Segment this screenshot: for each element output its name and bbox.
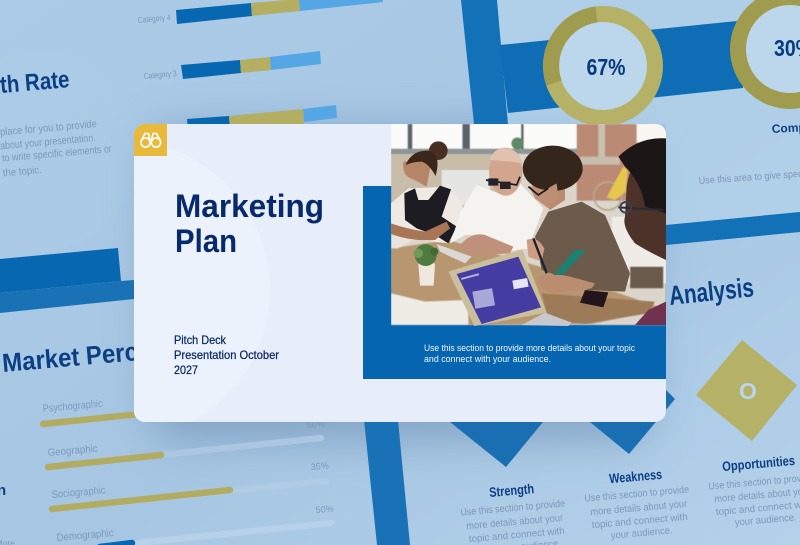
swot column: weakness: topic and connect with xyxy=(591,512,688,531)
caption xyxy=(424,343,635,364)
donut chart: 30% xyxy=(738,0,800,101)
diamond: opportunities: O xyxy=(739,378,757,404)
paragraph: growth rate: to write specific elements or xyxy=(2,143,113,165)
panel: title card xyxy=(134,124,666,422)
stacked bar: category 4: Category 4 xyxy=(137,12,171,25)
swot column: weakness: Weakness xyxy=(609,467,663,486)
progress bar: sociographic: Sociographic xyxy=(51,484,106,501)
blue band: left xyxy=(0,248,134,313)
progress bar: psychographic: Psychographic xyxy=(42,398,103,415)
swot column: weakness: your audience. xyxy=(610,525,673,542)
stacked bar: category 3 xyxy=(143,51,321,81)
subtitle: Pitch Deck xyxy=(174,333,227,347)
swot column: weakness xyxy=(584,467,690,542)
heading: market percentage: Market Percent xyxy=(1,333,175,378)
man xyxy=(450,183,543,252)
progress bar: psychographic xyxy=(42,396,318,424)
title: Plan xyxy=(175,223,237,259)
subtitle: Presentation October xyxy=(174,348,279,362)
background soft circle xyxy=(0,50,140,250)
photo: team around a laptop xyxy=(391,124,667,326)
left woman xyxy=(391,187,462,243)
heading: analysis: Analysis xyxy=(667,272,755,311)
swot column: strength: Use this section to provide xyxy=(460,498,566,519)
swot column: opportunities xyxy=(708,453,800,529)
swot column: opportunities: your audience. xyxy=(734,512,797,529)
progress bar: geographic: 50% xyxy=(306,418,325,430)
progress bar: geographic xyxy=(47,418,325,467)
blue block xyxy=(363,186,666,379)
diamond: weakness xyxy=(590,390,675,454)
swot column: strength: more details about your xyxy=(466,513,564,532)
center woman xyxy=(535,202,630,292)
caption: Use this section to provide more details about your topic xyxy=(424,343,635,353)
swot column: weakness: Use this section to provide xyxy=(584,484,690,505)
swot column: weakness: more details about your xyxy=(590,499,688,518)
paragraph: growth rate: place for you to provide xyxy=(0,118,97,138)
swot column: strength: topic and connect with xyxy=(468,526,565,545)
phone xyxy=(580,290,608,307)
diamond: opportunities xyxy=(696,340,797,441)
stacked bar: third row xyxy=(187,105,337,130)
swot column: strength xyxy=(460,481,566,545)
progress bar: sociographic xyxy=(51,460,329,509)
progress bar: demographic: Demographic xyxy=(56,527,114,544)
donut chart: 67% xyxy=(551,14,655,118)
progress bar: geographic: Geographic xyxy=(47,443,98,459)
paragraph: growth rate: the topic. xyxy=(2,164,42,179)
title xyxy=(175,188,324,259)
vertical blue band: bottom xyxy=(363,410,410,545)
plant in cup xyxy=(418,263,435,286)
horizontal blue band: top xyxy=(500,21,743,113)
card lighter curve xyxy=(134,411,145,422)
laptop xyxy=(448,249,547,326)
title: Marketing xyxy=(175,188,324,224)
panel: light slide right xyxy=(497,0,800,225)
caption: and connect with your audience. xyxy=(424,354,551,364)
progress bar: sociographic: 35% xyxy=(310,460,329,472)
progress bar: demographic xyxy=(56,503,334,545)
progress bar: demographic: 50% xyxy=(315,503,334,515)
subtitle: 2027 xyxy=(174,363,198,377)
stacked bar: category 4 xyxy=(137,0,383,25)
donut chart: 67%: 67% xyxy=(586,54,626,80)
subtitle xyxy=(174,333,279,377)
badge: binoculars xyxy=(134,124,167,156)
swot column: strength: Strength xyxy=(489,481,535,500)
vertical blue band: top xyxy=(461,0,508,124)
paragraph: growth rate: about your presentation. xyxy=(0,132,96,152)
stacked bar: category 3: Category 3 xyxy=(143,68,177,81)
card shadow xyxy=(150,130,650,440)
blue band: right xyxy=(666,212,800,245)
diamond: strength xyxy=(450,422,543,467)
right person xyxy=(624,172,666,260)
paragraph: growth rate xyxy=(0,118,113,179)
